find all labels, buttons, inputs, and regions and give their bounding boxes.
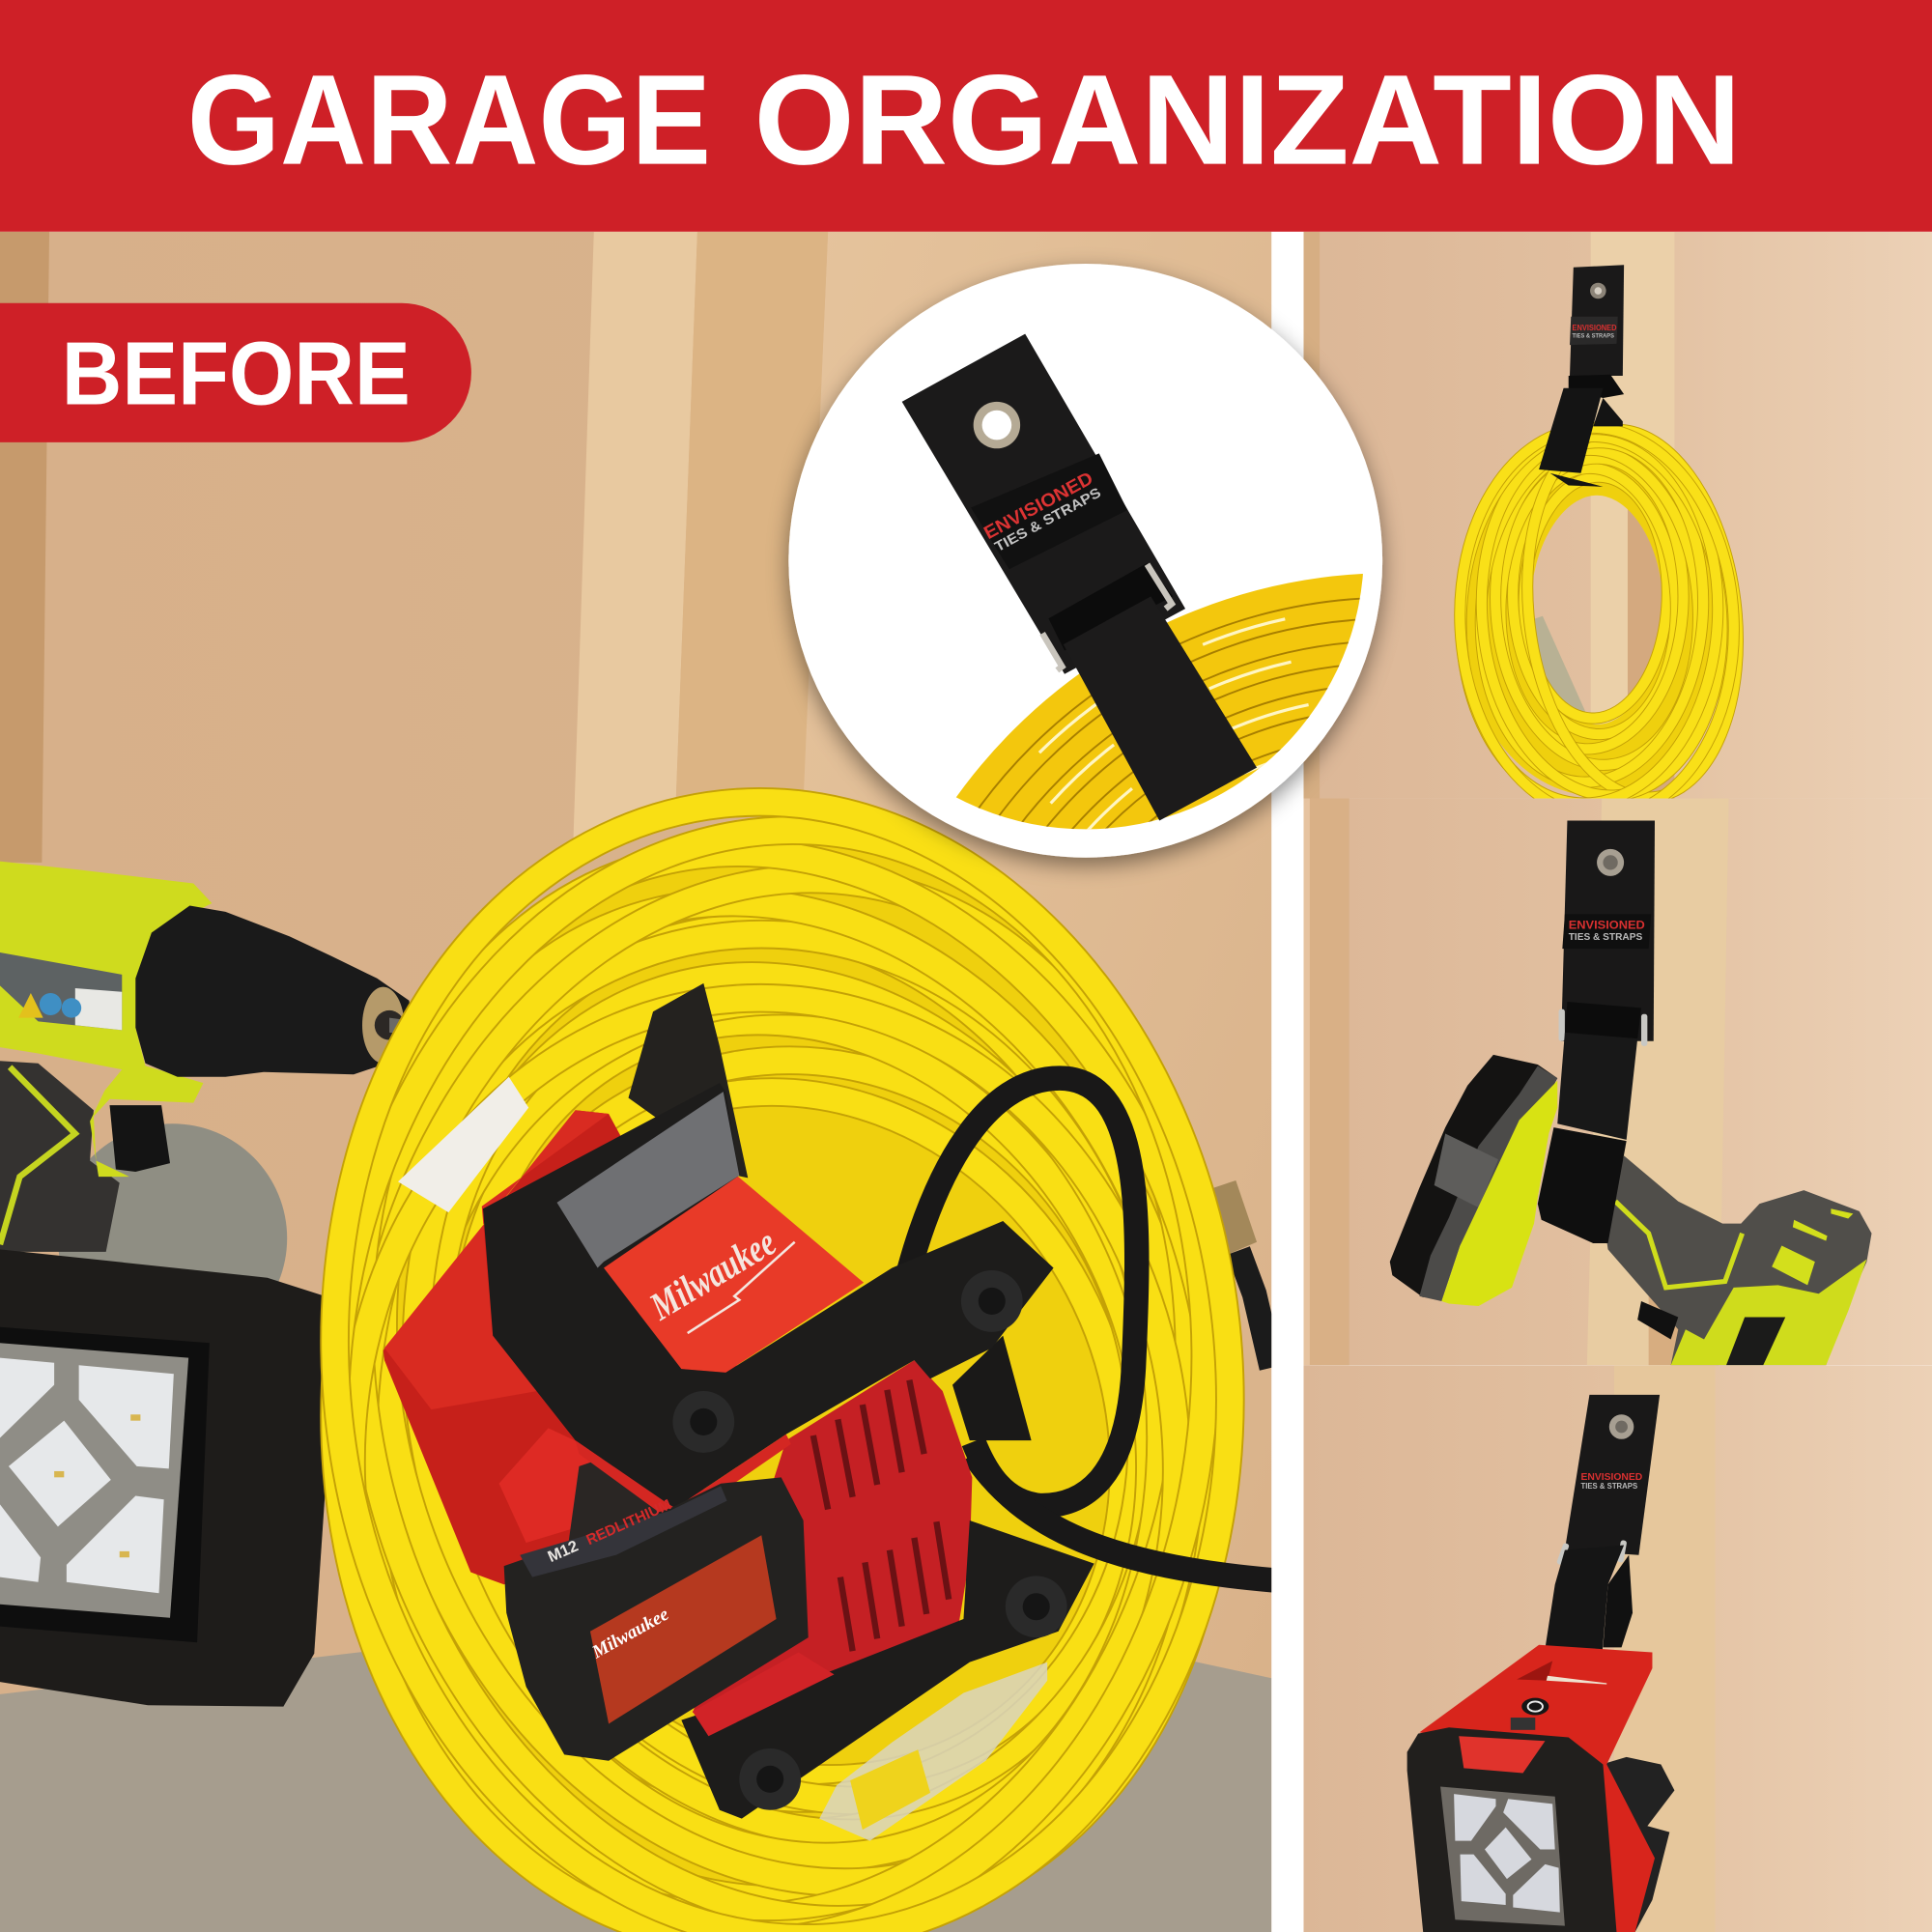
- concrete floor: [0, 1651, 1271, 1932]
- title: ORGANIZATION: [754, 49, 1741, 192]
- red work light: [1407, 1645, 1674, 1932]
- Milwaukee light and battery: [384, 983, 1094, 1841]
- panel: hanging drill: [1303, 799, 1932, 1365]
- yellow extension cord coil: [320, 787, 1245, 1932]
- battery pack: [504, 1477, 809, 1761]
- panel: hanging work light: [1303, 1365, 1932, 1932]
- strap holding the cord: [1539, 265, 1624, 487]
- inset circle: strap closeup: [788, 264, 1904, 1620]
- title: GARAGE: [187, 49, 711, 192]
- small yellow coil: [1454, 421, 1744, 798]
- black braided cord: [909, 1078, 1282, 1580]
- title: [187, 49, 1741, 192]
- work light: [0, 1249, 332, 1707]
- strap logo text: TIES & STRAPS: [992, 485, 1104, 555]
- strap holding the light: TIES & STRAPS: [1580, 1481, 1638, 1491]
- header banner: [0, 0, 1932, 232]
- rubber hose connector: [1213, 1180, 1271, 1371]
- strap closeup: [902, 334, 1257, 820]
- cord tag: [398, 1077, 528, 1212]
- strap holding the light: ENVISIONED: [1580, 1472, 1642, 1483]
- strap holding the light: [1546, 1395, 1660, 1650]
- drill body: [1390, 1055, 1872, 1365]
- wooden stud: [573, 232, 828, 850]
- before label: BEFORE: [62, 323, 411, 423]
- panel: hanging extension cord: [1303, 232, 1932, 824]
- cordless drill: [0, 862, 410, 1281]
- before badge: [0, 303, 471, 442]
- small plug: [1535, 616, 1585, 711]
- strap holding the cord: ENVISIONED: [1573, 323, 1616, 332]
- battery pack: Milwaukee: [588, 1604, 672, 1663]
- strap holding the drill: [1538, 820, 1655, 1243]
- right wall board: [804, 232, 1271, 1678]
- wall post at far left: [0, 232, 49, 863]
- clear cord plug: [819, 1662, 1047, 1841]
- battery pack: M12: [545, 1537, 581, 1566]
- strap logo text: ENVISIONED: [980, 469, 1096, 544]
- battery pack: REDLITHIUM: [583, 1496, 673, 1548]
- yellow cord closeup: [881, 598, 1904, 1620]
- panel: before photo: [0, 232, 1328, 1932]
- strap holding the cord: TIES & STRAPS: [1573, 332, 1614, 339]
- strap holding the drill: ENVISIONED: [1569, 919, 1645, 932]
- white divider strip: [1271, 232, 1303, 1932]
- brand wordmark: Milwaukee: [641, 1220, 783, 1328]
- strap holding the drill: TIES & STRAPS: [1569, 932, 1642, 943]
